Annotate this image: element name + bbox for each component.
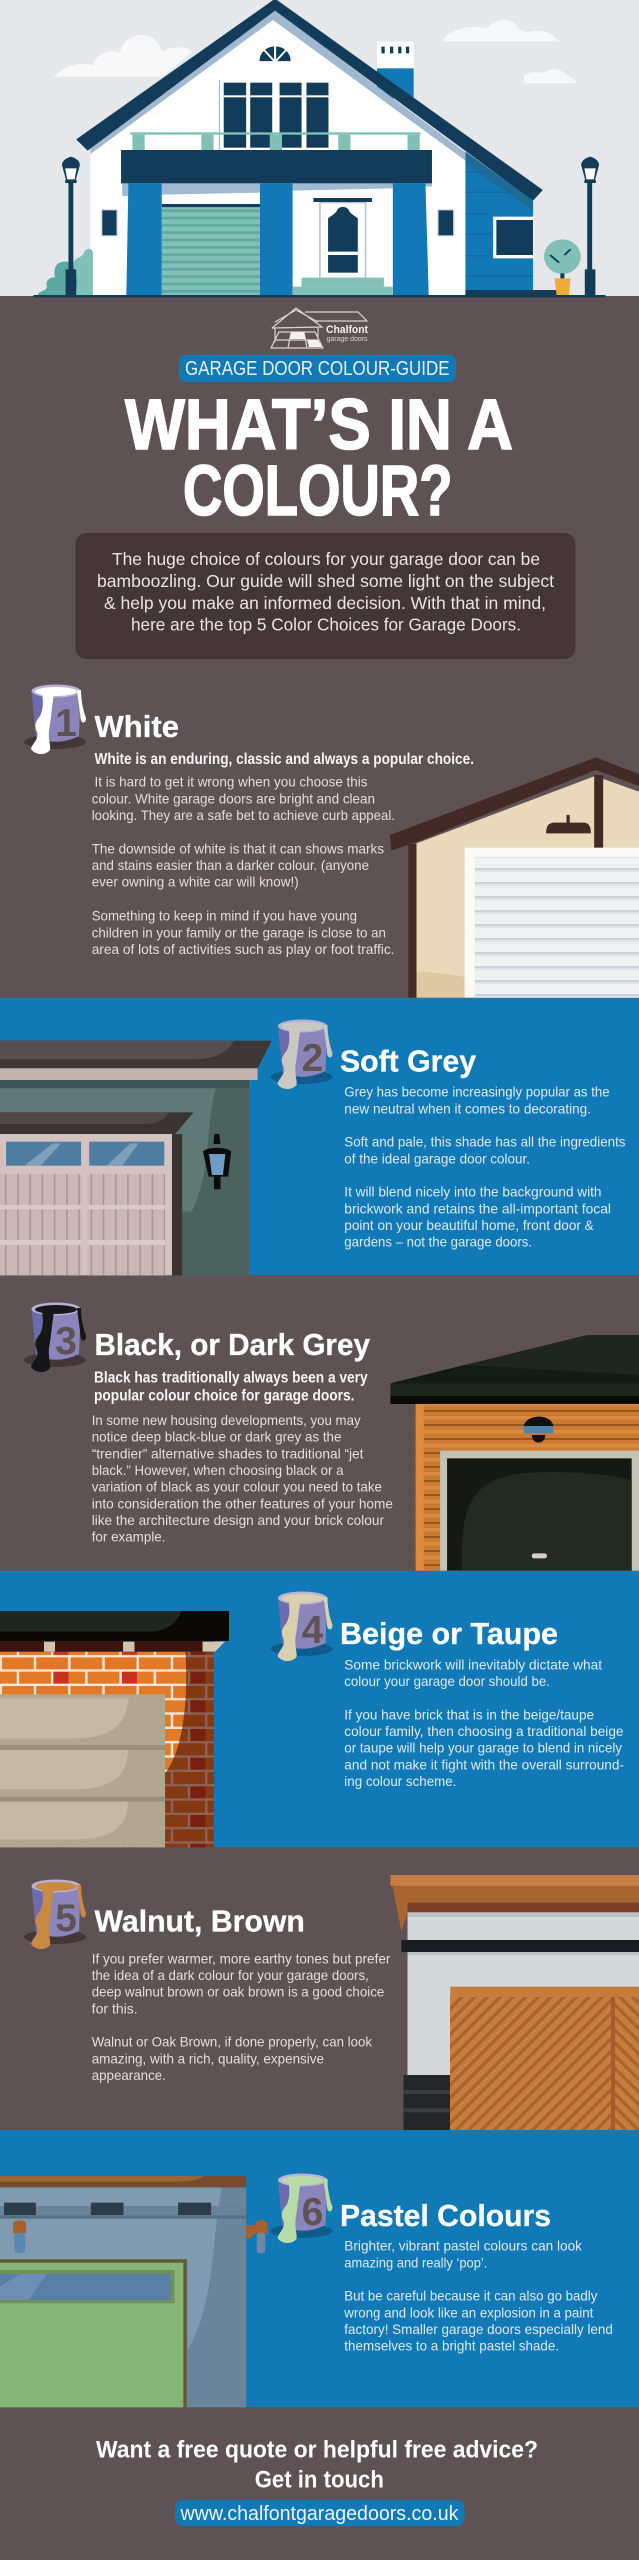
intro panel: here are the top 5 Color Choices for Garage Doors. (131, 614, 521, 634)
body text: looking. They are a safe bet to achieve curb appeal. (92, 807, 395, 823)
heading: Pastel Colours (340, 2198, 551, 2233)
tag: garage door colour-guide: GARAGE DOOR COLOUR-GUIDE (185, 358, 450, 380)
icon: grey paint can: 2 (302, 1037, 323, 1080)
heading: Soft Grey (340, 1044, 477, 1079)
icon: black paint can (24, 1302, 86, 1372)
intro panel: bamboozling. Our guide will shed some light on the subject (97, 571, 554, 591)
illustration: white garage (390, 757, 639, 998)
roof (90, 10, 465, 161)
body text: children in your family or the garage is close to an (92, 924, 386, 940)
body text: for this. (92, 2000, 138, 2016)
icon: black paint can: 3 (55, 1320, 77, 1363)
illustration: pastel garage (0, 2176, 268, 2407)
body text: variation of black as your colour you need to take (92, 1479, 382, 1495)
subheading: Black has traditionally always been a very (94, 1370, 368, 1387)
icon: grey paint can (270, 1020, 332, 1089)
body text: and not make it fight with the overall surround- (344, 1756, 624, 1772)
panel: black or dark grey (24, 1302, 639, 1571)
body text: ever owning a white car will know!) (92, 874, 299, 890)
side wall window (493, 217, 534, 258)
illustration: black garage (390, 1335, 639, 1571)
body text: themselves to a bright pastel shade. (344, 2338, 559, 2354)
body text (343, 2238, 613, 2354)
intro panel: & help you make an informed decision. With that in mind, (104, 593, 546, 613)
body text: amazing and really ‘pop’. (344, 2254, 487, 2270)
icon: walnut paint can (24, 1880, 86, 1949)
body text: Some brickwork will inevitably dictate what (344, 1656, 602, 1672)
chimney (377, 42, 414, 98)
canopy beam shadows (122, 183, 432, 196)
body text: But be careful because it can also go badly (344, 2288, 597, 2304)
body text: Grey has become increasingly popular as the (344, 1084, 610, 1100)
illustration: grey garage (0, 1041, 272, 1275)
panel: pastel colours (0, 2130, 639, 2407)
body text: black.” However, when choosing black or a (92, 1462, 344, 1478)
body text: colour your garage door should be. (344, 1673, 550, 1689)
logo: garage doors (326, 336, 368, 343)
body text: notice deep black-blue or dark grey as the (92, 1429, 342, 1445)
body text (92, 1412, 393, 1545)
footer call to action (96, 2436, 538, 2526)
hero: house illustration (0, 0, 639, 297)
body text (344, 1084, 626, 1250)
icon: clouds (54, 20, 578, 83)
heading: White (94, 709, 179, 744)
pillars (126, 183, 162, 296)
icon: beige paint can: 4 (302, 1609, 324, 1652)
house body (90, 19, 465, 296)
body text: gardens – not the garage doors. (344, 1234, 532, 1250)
heading: Get in touch (255, 2466, 384, 2493)
heading: Beige or Taupe (340, 1616, 558, 1651)
icon: right lamp post (581, 157, 599, 296)
icon: pastel paint can: 6 (302, 2191, 323, 2234)
panel: walnut brown (24, 1875, 639, 2130)
body text: Soft and pale, this shade has all the ingredients (344, 1134, 626, 1150)
body text: colour. White garage doors are bright and clean (92, 790, 375, 806)
icon: left lamp post (62, 157, 80, 296)
illustration: walnut garage (390, 1875, 639, 2130)
panel: white (24, 684, 639, 998)
body text: of the ideal garage door colour. (344, 1150, 530, 1166)
body text (92, 1950, 391, 2083)
body text: In some new housing developments, you may (92, 1412, 361, 1428)
upper windows (224, 83, 328, 148)
panel: soft grey (0, 998, 639, 1275)
subheading (94, 1370, 368, 1405)
garage door (162, 204, 260, 296)
body text: area of lots of activities such as play or foot traffic. (92, 941, 394, 957)
body text: ing colour scheme. (344, 1773, 456, 1789)
body text: Walnut or Oak Brown, if done properly, can look (92, 2034, 373, 2050)
intro panel: The huge choice of colours for your garage door can be (112, 549, 540, 569)
body text (344, 1656, 624, 1789)
icon: bushes (37, 249, 93, 296)
body text: deep walnut brown or oak brown is a good choice (92, 1984, 384, 2000)
panel: beige or taupe (0, 1571, 639, 1847)
body text: amazing, with a rich, quality, expensive (92, 2050, 324, 2066)
illustration: brick garage with beige door (0, 1611, 229, 1847)
body text: into consideration the other features of your home (92, 1495, 393, 1511)
title: WHAT’S IN A (125, 386, 513, 465)
logo: Chalfont (326, 324, 368, 336)
body text: It is hard to get it wrong when you choose this (94, 774, 368, 790)
body text: “trendier” alternative shades to traditional “jet (92, 1445, 364, 1461)
front door (293, 198, 393, 296)
icon: garage lamp (524, 1417, 553, 1442)
body text: If you prefer warmer, more earthy tones but prefer (92, 1950, 391, 1966)
body text (92, 774, 395, 957)
body text: It will blend nicely into the background with (344, 1184, 602, 1200)
website pill: www.chalfontgaragedoors.co.uk (180, 2503, 459, 2525)
body text: factory! Smaller garage doors especially lend (344, 2321, 613, 2337)
body text: and stains easier than a darker colour. (anyone (92, 857, 369, 873)
heading (96, 2436, 538, 2493)
subheading: popular colour choice for garage doors. (94, 1388, 354, 1405)
icon: potted tree (544, 239, 581, 296)
body text: The downside of white is that it can shows marks (92, 840, 384, 856)
icon: beige paint can (270, 1592, 332, 1661)
balcony rail (130, 132, 421, 150)
title: COLOUR? (183, 452, 452, 531)
logo (271, 308, 368, 348)
icon: walnut paint can: 5 (55, 1897, 77, 1940)
heading: Want a free quote or helpful free advice? (96, 2436, 538, 2463)
icon: wall lights (13, 2220, 268, 2253)
body text: new neutral when it comes to decorating. (344, 1100, 591, 1116)
body text: the idea of a dark colour for your garage doors, (92, 1967, 369, 1983)
body text: Something to keep in mind if you have young (92, 908, 357, 924)
arched window (258, 45, 292, 62)
icon: wall lantern (203, 1134, 231, 1189)
body text: point on your beautiful home, front door & (344, 1217, 594, 1233)
side windows (101, 210, 454, 236)
body text: If you have brick that is in the beige/taupe (344, 1706, 594, 1722)
body text: like the architecture design and your brick colour (92, 1512, 384, 1528)
intro panel (76, 533, 576, 659)
heading: Walnut, Brown (94, 1904, 305, 1939)
body text: for example. (92, 1529, 166, 1545)
body text: brickwork and retains the all-important focal (344, 1200, 611, 1216)
body text: or taupe will help your garage to blend in nicely (344, 1740, 622, 1756)
subheading: White is an enduring, classic and always a popular choice. (94, 751, 474, 768)
body text: Brighter, vibrant pastel colours can look (344, 2238, 583, 2254)
title (125, 386, 513, 531)
body text: wrong and look like an explosion in a paint (343, 2304, 593, 2320)
icon: white paint can (24, 684, 86, 754)
icon: pastel paint can (270, 2174, 332, 2243)
heading: Black, or Dark Grey (94, 1327, 371, 1362)
icon: white paint can: 1 (55, 702, 77, 745)
body text: colour family, then choosing a traditional beige (344, 1723, 624, 1739)
body text: appearance. (92, 2067, 166, 2083)
